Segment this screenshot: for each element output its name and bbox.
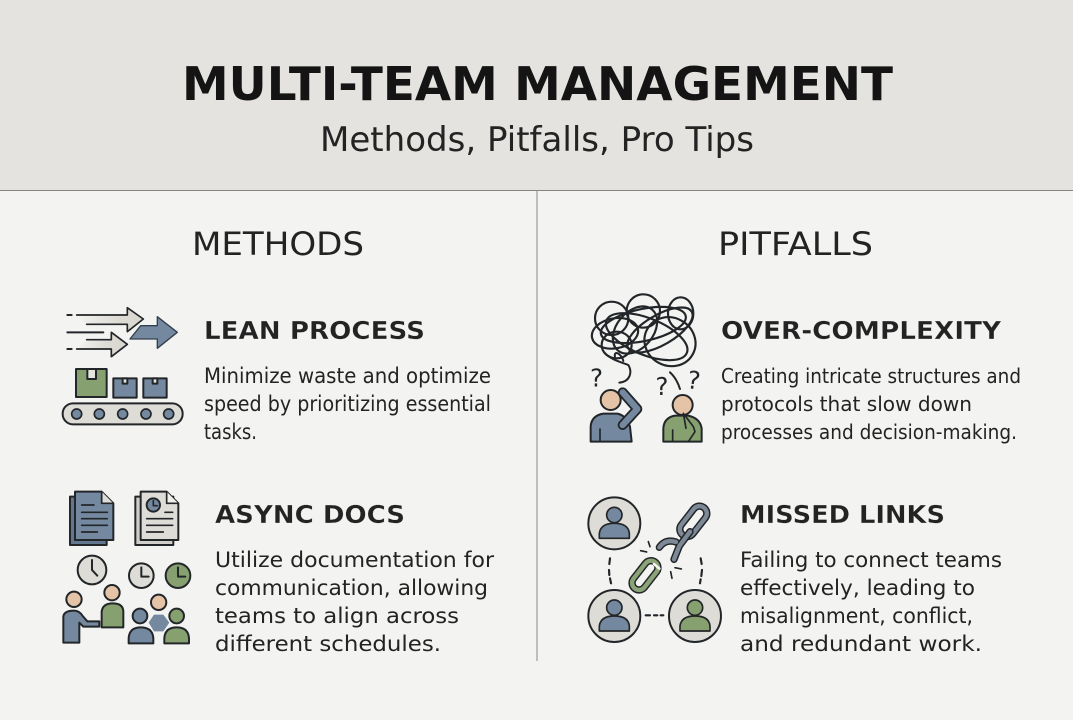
subheading: lean process: LEAN PROCESS xyxy=(204,316,425,345)
subtitle: Methods, Pitfalls, Pro Tips xyxy=(320,120,754,160)
text: lean process description: Minimize waste and optimize xyxy=(204,364,491,388)
subheading: async docs: ASYNC DOCS xyxy=(215,500,405,529)
text: lean process description xyxy=(204,364,491,444)
text: async docs description xyxy=(215,548,494,656)
text: over-complexity description xyxy=(721,364,1021,444)
pitfall: missed links xyxy=(588,497,1002,656)
panel: methods xyxy=(63,225,494,656)
icon: tangled thoughts and confused people: ? xyxy=(685,365,702,396)
method: async docs xyxy=(63,492,494,656)
subheading: missed links: MISSED LINKS xyxy=(740,500,945,529)
pitfall: over-complexity xyxy=(589,294,1021,444)
icon: broken chain linking people xyxy=(588,497,721,642)
text: over-complexity description: Creating intricate structures and xyxy=(721,364,1021,388)
method: lean process xyxy=(63,308,491,444)
icon: lean process arrows and conveyor xyxy=(63,308,183,424)
text: async docs description: different schedules. xyxy=(215,632,441,656)
title: MULTI-TEAM MANAGEMENT xyxy=(182,57,894,111)
text: missed links description xyxy=(740,548,1002,656)
heading: methods: METHODS xyxy=(192,225,364,263)
icon: documents, clocks and people xyxy=(63,492,190,643)
icon: tangled thoughts and confused people: ? xyxy=(655,372,668,401)
text: async docs description: teams to align across xyxy=(215,604,459,628)
text: lean process description: speed by prioritizing essential xyxy=(204,392,491,416)
panel: pitfalls xyxy=(588,225,1021,656)
text: async docs description: communication, allowing xyxy=(215,576,488,600)
text: over-complexity description: protocols that slow down xyxy=(721,392,972,416)
text: missed links description: effectively, leading to xyxy=(740,576,975,600)
subheading: over-complexity: OVER-COMPLEXITY xyxy=(721,316,1002,345)
header band xyxy=(0,0,1073,190)
text: lean process description: tasks. xyxy=(204,420,257,444)
text: missed links description: and redundant work. xyxy=(740,632,982,656)
icon: tangled thoughts and confused people: ? xyxy=(590,364,603,393)
text: async docs description: Utilize documentation for xyxy=(215,548,494,572)
text: over-complexity description: processes and decision-making. xyxy=(721,420,1017,444)
text: missed links description: Failing to connect teams xyxy=(740,548,1002,572)
heading: pitfalls: PITFALLS xyxy=(718,225,873,263)
text: missed links description: misalignment, conflict, xyxy=(740,604,973,628)
icon: tangled thoughts and confused people xyxy=(589,294,705,442)
